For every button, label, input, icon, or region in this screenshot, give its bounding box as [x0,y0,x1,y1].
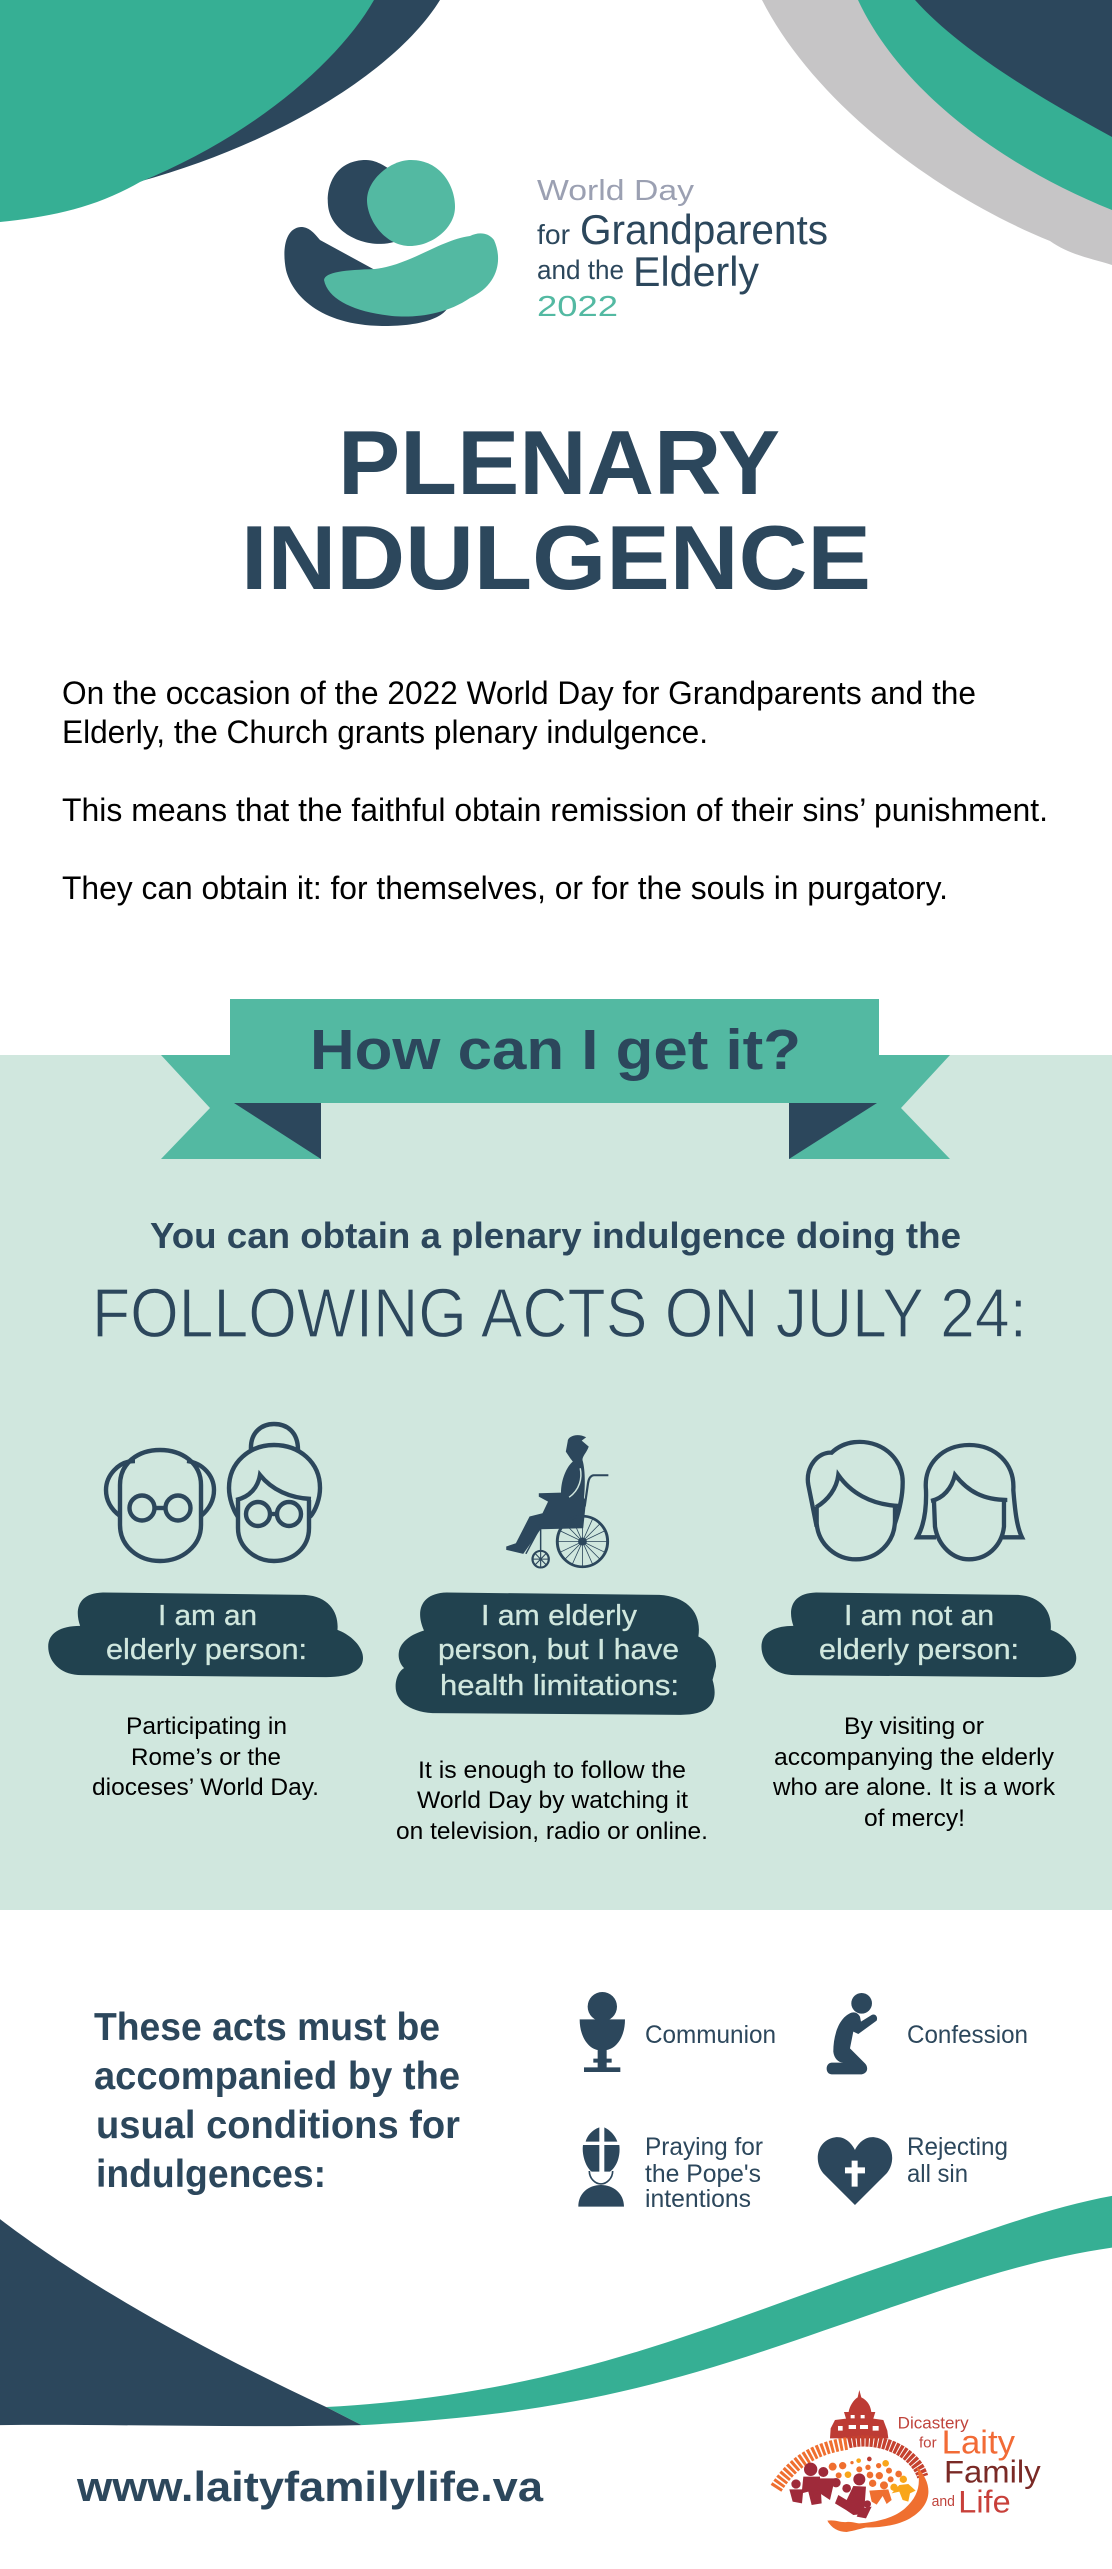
logo: wordmark: Dicastery [898,2413,969,2432]
logo wordmark [537,175,828,323]
callout pill: not elderly [761,1593,1076,1677]
icon: elderly couple [106,1424,320,1561]
label: praying for the Pope's intentions: the Pope's [645,2160,761,2188]
logo: wordmark: and [932,2494,955,2510]
label: praying for the Pope's intentions: intentions [645,2185,751,2213]
callout pill: not elderly: elderly person: [819,1634,1019,1666]
label: praying for the Pope's intentions [645,2133,763,2213]
website url: www.laityfamilylife.va [76,2463,544,2510]
icon: pope with mitre [578,2127,624,2207]
callout pill: health limitations: I am elderly [481,1600,638,1632]
label: rejecting all sin: all sin [907,2160,968,2188]
logo: Dicastery for Laity Family and Life [776,2390,1041,2532]
top right corner shapes [762,0,1112,265]
text: health limitations act: It is enough to follow the [418,1757,686,1784]
heading: usual conditions: indulgences: [96,2153,326,2196]
intro text: They can obtain it: for themselves, or for the souls in purgatory. [62,870,948,906]
callout pill: health limitations: health limitations: [440,1670,679,1702]
logo: World Day for Grandparents and the Elderly 2022 [284,160,828,326]
icon: kneeling person [827,1993,877,2074]
section heading: FOLLOWING ACTS ON JULY 24: [92,1274,1027,1352]
text: health limitations act: World Day by watching it [417,1787,688,1814]
text: not elderly act: accompanying the elderly [774,1744,1054,1771]
text: not elderly act: By visiting or [844,1713,984,1740]
title: INDULGENCE [241,508,871,609]
text: not elderly act [772,1713,1056,1832]
logo: wordmark: Laity [942,2424,1015,2461]
heading: usual conditions: accompanied by the [94,2055,460,2098]
section heading [92,1215,1027,1352]
logo wordmark: Grandparents [580,206,828,253]
text: not elderly act: of mercy! [864,1805,965,1832]
text: health limitations act [396,1757,708,1845]
heading: usual conditions [94,2006,460,2196]
label: confession: Confession [907,2021,1028,2049]
logo: wordmark [898,2413,1041,2520]
text: elderly person act [92,1713,319,1801]
section heading: You can obtain a plenary indulgence doing the [150,1215,961,1256]
logo wordmark: 2022 [537,291,618,323]
heading: usual conditions: usual conditions for [96,2104,460,2147]
logo wordmark: and the [537,255,624,285]
logo: wordmark: for [919,2435,937,2451]
logo wordmark: World Day [537,175,695,207]
logo: basilica and colonnade [776,2390,928,2532]
callout pill: health limitations [396,1593,716,1715]
title: PLENARY [338,413,780,514]
label: rejecting all sin: Rejecting [907,2133,1008,2161]
logo wordmark: for [537,219,570,250]
logo wordmark: Elderly [633,248,759,295]
ribbon banner [161,999,950,1159]
icon: communion chalice [580,1992,625,2072]
text: elderly person act: Rome’s or the [131,1744,281,1771]
heading: usual conditions: These acts must be [94,2006,440,2049]
icon: person in wheelchair [506,1435,608,1567]
intro text [62,675,1048,906]
callout pill: elderly person: elderly person: [106,1634,307,1666]
icon: adult couple [808,1442,1022,1559]
intro text: On the occasion of the 2022 World Day for Grandparents and the [62,675,976,711]
logo: wordmark: Life [958,2485,1011,2520]
bottom swoosh [0,2195,1112,2426]
callout pill: elderly person [48,1593,363,1677]
intro text: This means that the faithful obtain remission of their sins’ punishment. [62,792,1048,828]
logo: family figures [789,2457,916,2518]
callout pill: health limitations: person, but I have [438,1634,679,1666]
intro text: Elderly, the Church grants plenary indulgence. [62,714,708,750]
ribbon banner: How can I get it? [310,1018,801,1082]
text: elderly person act: dioceses’ World Day. [92,1774,319,1801]
label: rejecting all sin [907,2133,1008,2188]
callout pill: elderly person: I am an [158,1600,257,1632]
text: not elderly act: who are alone. It is a work [772,1774,1056,1801]
top left corner shapes [0,0,440,222]
label: communion: Communion [645,2021,776,2049]
callout pill: not elderly: I am not an [844,1600,994,1632]
icon: heart with cross [818,2137,892,2205]
text: health limitations act: on television, radio or online. [396,1818,708,1845]
label: praying for the Pope's intentions: Praying for [645,2133,763,2161]
logo: wordmark: Family [944,2455,1041,2490]
text: elderly person act: Participating in [126,1713,287,1740]
logo mark [284,160,498,326]
title [241,413,871,609]
panel: how can I get it background [0,1055,1112,1910]
